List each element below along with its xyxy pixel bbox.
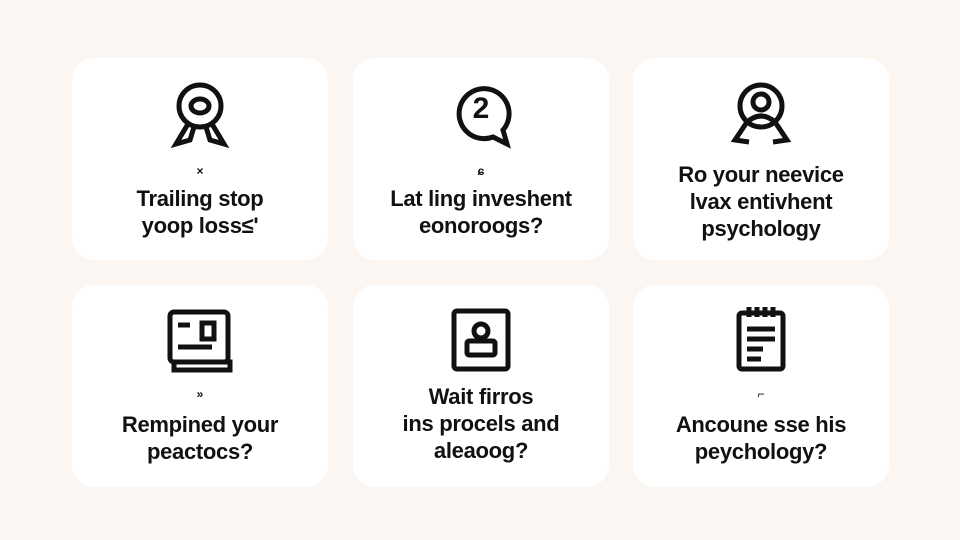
icon: award medal bbox=[170, 82, 230, 148]
icon: notepad bbox=[736, 307, 786, 372]
text bbox=[390, 186, 572, 238]
text: aleaoog? bbox=[434, 438, 528, 463]
text bbox=[122, 412, 278, 464]
panel: investment bbox=[353, 58, 609, 260]
text: psychology bbox=[701, 216, 821, 241]
marker: » bbox=[197, 387, 203, 401]
text bbox=[403, 384, 559, 463]
text: yoop loss≤' bbox=[142, 213, 258, 238]
text: Ro your neevice bbox=[678, 162, 844, 187]
icon: number 2 bubble bbox=[456, 86, 512, 149]
marker: × bbox=[196, 164, 204, 178]
icon: id card bbox=[452, 308, 510, 372]
text: Rempined your bbox=[122, 412, 278, 437]
panel: practices bbox=[72, 285, 328, 487]
text bbox=[136, 186, 263, 238]
text bbox=[678, 162, 844, 241]
icon: book bbox=[168, 310, 232, 372]
panel: psychology bbox=[633, 58, 889, 260]
text: Wait firros bbox=[429, 384, 533, 409]
text: ins procels and bbox=[403, 411, 559, 436]
text: peychology? bbox=[695, 439, 827, 464]
text: lvax entivhent bbox=[690, 189, 832, 214]
text: eonoroogs? bbox=[419, 213, 543, 238]
icon: number 2 bubble: 2 bbox=[473, 92, 489, 125]
marker: ⌐ bbox=[757, 387, 764, 401]
panel: trailing stop bbox=[72, 58, 328, 260]
icon: person circle bbox=[730, 82, 792, 144]
text bbox=[676, 412, 846, 464]
panel: process bbox=[353, 285, 609, 487]
text: Lat ling inveshent bbox=[390, 186, 572, 211]
text: peactocs? bbox=[147, 439, 253, 464]
text: Trailing stop bbox=[137, 186, 263, 211]
marker: ɕ bbox=[478, 164, 484, 178]
panel: notepad bbox=[633, 285, 889, 487]
text: Ancoune sse his bbox=[676, 412, 846, 437]
